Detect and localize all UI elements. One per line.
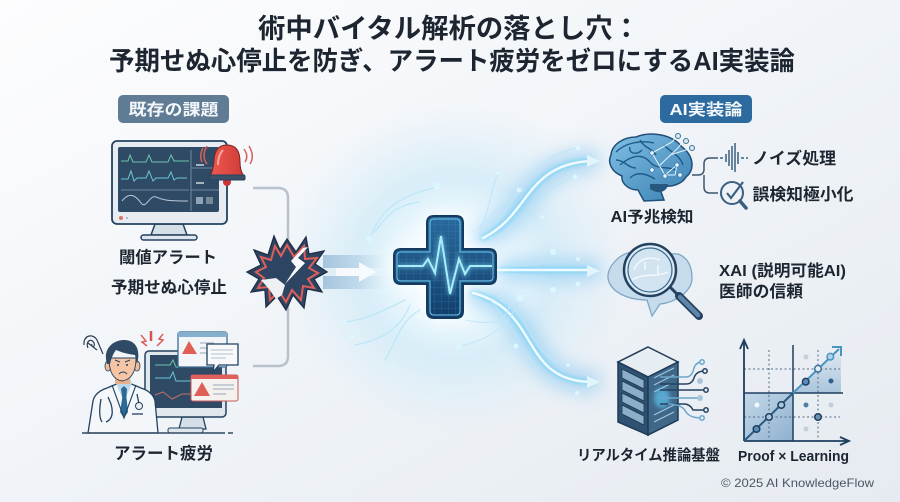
label: XAI and physician trust (719, 261, 846, 301)
icon: magnifier over brain (608, 244, 699, 316)
chart: proof x learning quadrant (740, 340, 849, 445)
badge: AI implementation: AI実装論 (670, 101, 742, 119)
label: threshold alert: 閾値アラート (119, 248, 217, 267)
icon: checked magnifier (721, 182, 746, 208)
central glow (280, 103, 630, 433)
badge: existing issues: 既存の課題 (128, 101, 218, 119)
flow arrow to center (323, 255, 385, 289)
icon: medical cross with heartbeat (394, 216, 496, 318)
label: XAI and physician trust: XAI (説明可能AI) (719, 261, 846, 280)
label: realtime inference platform: リアルタイム推論基盤 (577, 446, 720, 464)
title: 予期せぬ心停止を防ぎ、アラート疲労をゼロにするAI実装論 (109, 46, 795, 76)
connector bracket (253, 188, 288, 366)
label: unexpected cardiac arrest: 予期せぬ心停止 (111, 278, 227, 297)
title: 術中バイタル解析の落とし穴： (258, 14, 640, 44)
icon: AI brain (610, 134, 694, 201)
badge: existing issues (118, 95, 229, 123)
badge: AI implementation (660, 95, 752, 123)
copyright: © 2025 AI KnowledgeFlow (721, 476, 874, 490)
icon: waveform (720, 143, 748, 172)
label: AI early detection: AI予兆検知 (610, 207, 694, 226)
title (109, 14, 795, 76)
icon: doctor with alerts (82, 331, 238, 433)
bracket to noise and false detection (692, 158, 718, 193)
icon: server with data lines (618, 347, 708, 435)
energy streams (343, 146, 600, 395)
label: minimize false detection: 誤検知極小化 (752, 185, 854, 204)
label: alert fatigue: アラート疲労 (114, 444, 213, 463)
label: noise processing: ノイズ処理 (752, 148, 837, 168)
icon: collision starburst (247, 236, 327, 310)
label: XAI and physician trust: 医師の信頼 (719, 282, 804, 301)
label: proof x learning: Proof × Learning (738, 449, 849, 465)
icon: monitor with alarm (112, 141, 252, 240)
